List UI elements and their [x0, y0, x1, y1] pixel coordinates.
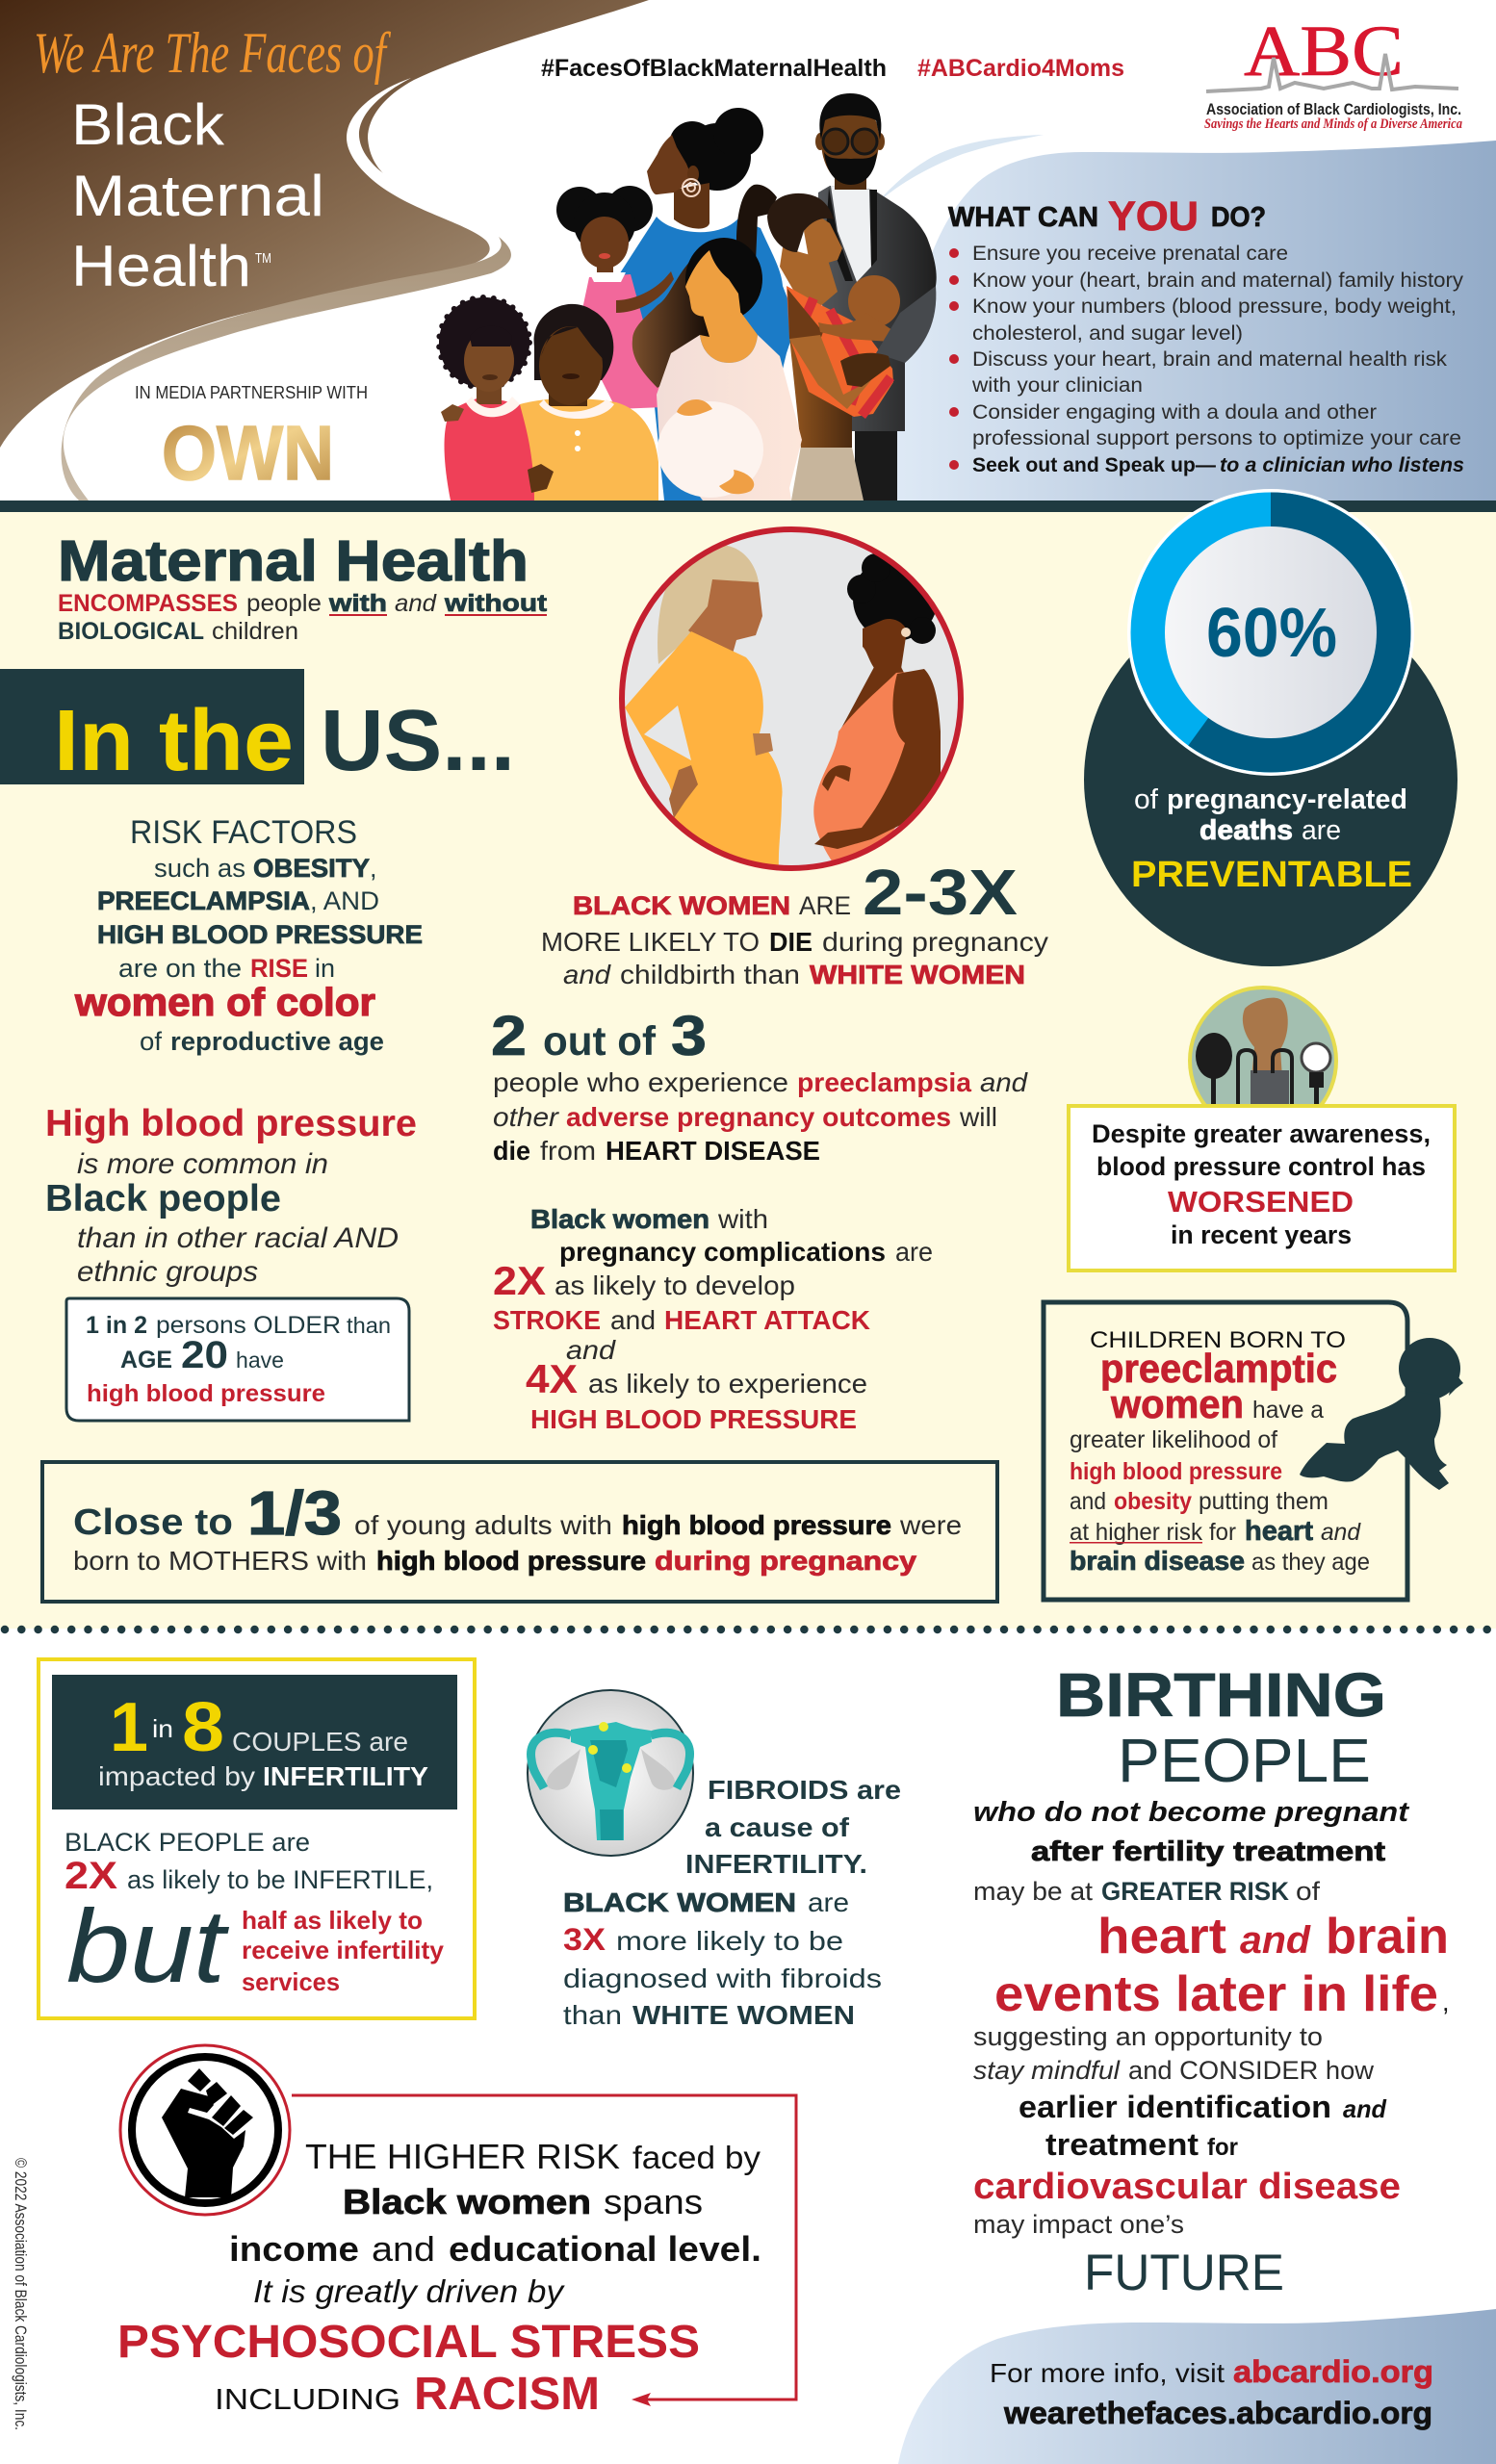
banner: 1 in 8 couples: 1: [110, 1689, 148, 1766]
text block: birthing people: who do not become pregnant: [973, 1797, 1409, 1828]
text block: risk factors: ,: [370, 854, 377, 883]
heading: Maternal Health: Maternal Health: [58, 529, 529, 593]
stat: 60% preventable: deaths: [1199, 815, 1293, 846]
text block: risk factors: in: [315, 954, 335, 983]
text block: birthing people: GREATER RISK: [1101, 1877, 1289, 1906]
callout: close to 1/3: born to MOTHERS with: [73, 1546, 367, 1576]
text block: risk factors: such as: [154, 854, 245, 883]
callout: close to 1/3: during pregnancy: [655, 1546, 916, 1576]
text block: risk factors: of: [140, 1027, 162, 1056]
panel: infertility: BLACK PEOPLE are: [64, 1828, 310, 1857]
text block: Black women pregnancy complications: as likely to experience: [588, 1369, 867, 1399]
text block: birthing people: events later in life: [994, 1966, 1438, 2022]
text block: birthing people: brain: [1326, 1909, 1449, 1964]
callout: children born to preeclamptic women: and: [1321, 1519, 1361, 1546]
callout: children born to preeclamptic women: and: [1070, 1488, 1106, 1515]
divider: dotted line: [0, 1629, 1496, 2464]
text block: 2-3X more likely to die: and: [563, 960, 611, 989]
heading: Maternal Health: ENCOMPASSES: [58, 590, 238, 617]
figure: woman in blue: [597, 108, 794, 500]
text block: risk factors: [74, 814, 423, 1056]
banner: 1 in 8 couples: in: [152, 1714, 173, 1743]
stat: 60% preventable: are: [1302, 815, 1341, 846]
panel: infertility: as likely to be INFERTILE,: [127, 1865, 433, 1894]
text block: Black women pregnancy complications: [493, 1204, 933, 1434]
text block: fibroids: BLACK WOMEN: [563, 1887, 796, 1917]
bullet list: Seek out and Speak up—: [972, 454, 1216, 476]
bullet list: Ensure you receive prenatal care: [972, 243, 1288, 265]
text block: birthing people: cardiovascular disease: [973, 2167, 1401, 2207]
callout: 1 in 2 persons: 1 in 2: [86, 1312, 147, 1339]
text block: high blood pressure in Black people: than in other racial AND: [77, 1222, 399, 1254]
media partnership: OWN: OWN: [162, 410, 334, 496]
banner: 1 in 8 couples: 8: [182, 1689, 224, 1766]
panel: what can you do: [948, 193, 1464, 476]
title: Black Maternal Health: Black: [71, 92, 225, 157]
text block: Black women pregnancy complications: STROKE: [493, 1305, 601, 1335]
arrowhead: [632, 2393, 651, 2406]
text block: Black women pregnancy complications: and: [566, 1335, 617, 1365]
callout: blood pressure control worsened: Despite greater awareness,: [1092, 1119, 1431, 1148]
callout: children born to preeclamptic women: high blood pressure: [1070, 1458, 1282, 1485]
figure: woman in red with afro: [439, 297, 549, 500]
text block: risk factors: HIGH BLOOD PRESSURE: [97, 920, 423, 949]
text block: birthing people: treatment: [1045, 2127, 1199, 2162]
text block: 2 out of 3: out of: [543, 1018, 657, 1065]
text block: birthing people: and: [1240, 1919, 1312, 1962]
title: Black Maternal Health: [71, 92, 324, 298]
text block: birthing people: heart: [1097, 1909, 1226, 1964]
text block: 2 out of 3: adverse pregnancy outcomes: [566, 1102, 951, 1132]
bullet list: Know your numbers (blood pressure, body weight,: [972, 295, 1457, 318]
background: cream section: [0, 510, 1496, 1629]
callout: 1 in 2 persons: [66, 1298, 409, 1421]
panel: infertility: but: [66, 1887, 229, 2004]
text block: 2 out of 3: [491, 1005, 1028, 1166]
text block: birthing people: earlier identification: [1019, 2090, 1331, 2124]
callout: 1 in 2 persons: than: [347, 1313, 391, 1338]
panel: infertility: 2X: [64, 1855, 117, 1897]
text block: psychosocial stress and racism: spans: [604, 2182, 703, 2221]
text block: high blood pressure in Black people: [45, 1103, 417, 1288]
callout: children born to preeclamptic women: greater likelihood of: [1070, 1426, 1277, 1453]
hashtags: [541, 55, 1124, 82]
banner: 1 in 8 couples: INFERTILITY: [263, 1761, 428, 1791]
heading: Maternal Health: BIOLOGICAL: [58, 618, 204, 645]
figure: woman with braids holding baby: [736, 185, 936, 500]
text block: birthing people: and: [1343, 2094, 1387, 2123]
callout: close to 1/3: 1/3: [247, 1478, 342, 1548]
illustration: two pregnant women in circle: [622, 529, 961, 871]
heading: Maternal Health: people: [246, 590, 322, 617]
arrow: red connector line to racism: [292, 2095, 796, 2400]
callout: children born to preeclamptic women: brain disease: [1070, 1546, 1245, 1576]
callout: 1 in 2 persons: have: [236, 1348, 284, 1373]
text block: birthing people: stay mindful: [973, 2056, 1121, 2085]
illustration: family group: [439, 93, 937, 500]
banner: 1 in 8 couples: impacted by: [98, 1761, 255, 1791]
text block: 2-3X more likely to die: MORE LIKELY TO: [541, 927, 760, 957]
callout: 1 in 2 persons: AGE: [120, 1347, 172, 1373]
callout: close to 1/3: high blood pressure: [622, 1510, 891, 1540]
text block: 2-3X more likely to die: childbirth than: [620, 960, 800, 989]
callout: children born to preeclamptic women: obesity: [1114, 1488, 1192, 1515]
figure: child in pink: [556, 186, 674, 409]
text block: birthing people: may impact one’s: [973, 2210, 1184, 2239]
bullet list: Discuss your heart, brain and maternal health risk: [972, 348, 1448, 371]
text block: birthing people: may be at: [973, 1877, 1094, 1906]
decorative blue swoosh and panel: [873, 135, 1496, 500]
text block: birthing people: PEOPLE: [1118, 1726, 1371, 1795]
hashtags: #FacesOfBlackMaternalHealth: [541, 55, 887, 82]
text block: 2 out of 3: people who experience: [493, 1067, 788, 1097]
panel: infertility: services: [242, 1967, 340, 1996]
text block: high blood pressure in Black people: Black people: [45, 1178, 281, 1219]
text block: psychosocial stress and racism: educational level.: [449, 2229, 761, 2269]
text block: psychosocial stress and racism: Black women: [343, 2182, 591, 2221]
text block: fibroids: than: [563, 2000, 622, 2030]
callout: 1 in 2 persons: persons OLDER: [156, 1312, 341, 1339]
footer: blue panel with links: wearethefaces.abcardio.org: [1003, 2396, 1432, 2430]
heading: what can you do: [948, 193, 1266, 240]
text block: high blood pressure in Black people: High blood pressure: [45, 1103, 417, 1144]
panel: infertility: receive infertility: [242, 1936, 445, 1964]
text block: 2-3X more likely to die: DIE: [769, 927, 812, 957]
text block: high blood pressure in Black people: is more common in: [77, 1148, 328, 1180]
logo: Association of Black Cardiologists: Savings the Hearts and Minds of a Diverse America: [1204, 116, 1462, 132]
figure: woman in yellow: [520, 304, 658, 500]
text block: 2-3X more likely to die: [541, 857, 1048, 989]
bullet list: Consider engaging with a doula and other: [972, 401, 1377, 424]
title: Black Maternal Health: TM: [255, 250, 271, 267]
heading: Maternal Health: and: [395, 590, 437, 617]
bullet list: to a clinician who listens: [1220, 454, 1464, 476]
panel: infertility: half as likely to: [242, 1906, 423, 1935]
text block: Black women pregnancy complications: Black women: [530, 1204, 709, 1234]
heading: Maternal Health: [58, 529, 548, 645]
icon: raised fist: [120, 2045, 290, 2215]
text block: fibroids: a cause of: [705, 1812, 850, 1842]
heading: Maternal Health: children: [212, 618, 298, 645]
text block: birthing people: BIRTHING: [1056, 1660, 1386, 1730]
text block: fibroids: more likely to be: [616, 1926, 843, 1956]
callout: blood pressure control worsened: in recent years: [1171, 1220, 1352, 1249]
text block: 2 out of 3: die: [493, 1136, 530, 1166]
text block: Black women pregnancy complications: with: [717, 1204, 768, 1234]
donut chart: 60 percent: [1148, 510, 1393, 755]
callout: children born to preeclamptic women: have a: [1252, 1397, 1324, 1424]
text block: fibroids: WHITE WOMEN: [632, 2000, 855, 2030]
text block: risk factors: women of color: [74, 980, 375, 1024]
text block: fibroids: diagnosed with fibroids: [563, 1964, 882, 1993]
divider band: [0, 500, 1496, 512]
media partnership: OWN: IN MEDIA PARTNERSHIP WITH: [135, 383, 368, 402]
heading: Maternal Health: without: [444, 590, 548, 617]
footer: blue panel with links: For more info, visit: [990, 2358, 1225, 2388]
text block: risk factors: , AND: [310, 886, 379, 915]
icon: blood pressure cuff and fist: [1188, 986, 1338, 1104]
callout: children born to preeclamptic women: heart: [1245, 1516, 1313, 1547]
figure: man with glasses: [815, 93, 937, 500]
bullet list: Know your (heart, brain and maternal) family history: [972, 270, 1464, 292]
heading: what can you do: YOU: [1108, 193, 1199, 240]
callout: children born to preeclamptic women: putting them: [1199, 1488, 1328, 1515]
stat: 60% preventable: PREVENTABLE: [1131, 855, 1412, 895]
text block: birthing people: and CONSIDER how: [1128, 2056, 1374, 2085]
text block: 2 out of 3: and: [980, 1067, 1028, 1097]
heading: In the US: In the: [54, 693, 294, 789]
text block: risk factors: RISE: [250, 954, 308, 983]
text block: Black women pregnancy complications: HEART ATTACK: [664, 1305, 870, 1335]
text block: 2 out of 3: 3: [671, 1005, 707, 1067]
banner: 1 in 8 couples: COUPLES are: [232, 1727, 408, 1757]
text block: 2-3X more likely to die: ARE: [799, 891, 851, 920]
heading: In the US: US...: [321, 693, 515, 789]
text block: risk factors: PREECLAMPSIA: [97, 886, 310, 915]
text block: psychosocial stress and racism: income: [229, 2229, 359, 2269]
callout: blood pressure control worsened: [1069, 1106, 1455, 1270]
text block: 2 out of 3: HEART DISEASE: [606, 1136, 820, 1166]
callout: close to 1/3: high blood pressure: [376, 1546, 646, 1576]
text block: psychosocial stress and racism: faced by: [632, 2140, 761, 2175]
figure: pregnant woman: [632, 238, 802, 500]
text block: Black women pregnancy complications: HIGH BLOOD PRESSURE: [530, 1404, 857, 1434]
text block: psychosocial stress and racism: THE HIGHER RISK: [305, 2137, 620, 2176]
callout: children born to preeclamptic women: at higher risk: [1070, 1519, 1202, 1546]
text block: Black women pregnancy complications: pregnancy complications: [559, 1237, 886, 1267]
text block: psychosocial stress and racism: [117, 2137, 761, 2420]
text block: Black women pregnancy complications: are: [895, 1237, 933, 1267]
callout: children born to preeclamptic women: preeclamptic: [1100, 1346, 1337, 1391]
text block: birthing people: for: [1207, 2134, 1238, 2161]
logo: Association of Black Cardiologists: ABC: [1244, 12, 1404, 91]
text block: high blood pressure in Black people: ethnic groups: [77, 1256, 258, 1288]
text block: psychosocial stress and racism: INCLUDING: [215, 2382, 400, 2416]
text block: birthing people: FUTURE: [1084, 2245, 1284, 2301]
text block: psychosocial stress and racism: It is greatly driven by: [253, 2273, 566, 2309]
bullet list: professional support persons to optimize your care: [972, 427, 1461, 449]
hashtags: #ABCardio4Moms: [917, 55, 1124, 82]
heading: In the US: [0, 669, 515, 789]
text block: risk factors: OBESITY: [253, 854, 370, 883]
text block: birthing people: after fertility treatment: [1031, 1836, 1385, 1867]
text block: birthing people: [973, 1660, 1450, 2301]
callout: close to 1/3: Close to: [73, 1502, 233, 1543]
text block: fibroids: [563, 1775, 901, 2030]
callout: blood pressure control worsened: WORSENED: [1168, 1185, 1354, 1219]
callout: 1 in 2 persons: 20: [181, 1334, 228, 1376]
header: brown swoosh banner: [0, 0, 649, 500]
callout: close to 1/3: [42, 1462, 997, 1602]
text block: fibroids: INFERTILITY.: [685, 1849, 867, 1879]
text block: 2 out of 3: preeclampsia: [797, 1067, 971, 1097]
text block: 2-3X more likely to die: BLACK WOMEN: [573, 891, 790, 920]
callout: children born to preeclamptic women: as they age: [1251, 1549, 1370, 1576]
text block: psychosocial stress and racism: RACISM: [414, 2369, 600, 2420]
text block: fibroids: 3X: [563, 1922, 606, 1957]
stat: 60% preventable: pregnancy-related: [1167, 784, 1407, 815]
text block: fibroids: are: [808, 1887, 849, 1917]
text block: birthing people: of: [1296, 1877, 1321, 1906]
text block: psychosocial stress and racism: PSYCHOSOCIAL STRESS: [117, 2317, 700, 2368]
media partnership: OWN: [135, 383, 368, 496]
callout: 1 in 2 persons: high blood pressure: [87, 1380, 325, 1407]
logo: Association of Black Cardiologists: [1204, 12, 1462, 132]
text block: 2-3X more likely to die: WHITE WOMEN: [810, 960, 1025, 989]
text block: Black women pregnancy complications: 4X: [526, 1356, 578, 1401]
text block: risk factors: are on the: [118, 954, 242, 983]
title: Black Maternal Health: Maternal: [71, 164, 324, 228]
text block: 2-3X more likely to die: 2-3X: [863, 857, 1018, 929]
footer: blue panel with links: [898, 2309, 1496, 2464]
bullet list: with your clinician: [971, 374, 1143, 397]
text block: 2 out of 3: other: [493, 1102, 560, 1132]
stat: 60% preventable: [1084, 489, 1457, 966]
text block: fibroids: FIBROIDS are: [708, 1775, 901, 1805]
icon: crawling baby silhouette: [1300, 1338, 1463, 1490]
donut chart: 60 percent: 60%: [1206, 595, 1337, 672]
callout: children born to preeclamptic women: CHILDREN BORN TO: [1090, 1327, 1346, 1353]
banner: 1 in 8 couples: [52, 1675, 457, 1810]
callout: children born to preeclamptic women: for: [1209, 1519, 1236, 1546]
callout: close to 1/3: were: [899, 1510, 962, 1540]
text block: 2 out of 3: 2: [491, 1005, 527, 1067]
callout: close to 1/3: of young adults with: [354, 1510, 612, 1540]
text block: 2 out of 3: will: [959, 1102, 997, 1132]
bullet list: [949, 243, 1464, 476]
callout: children born to preeclamptic women: [1044, 1302, 1407, 1600]
text block: birthing people: ,: [1442, 1988, 1450, 2016]
text block: 2-3X more likely to die: during pregnancy: [822, 927, 1048, 957]
text block: 2 out of 3: from: [540, 1136, 596, 1166]
panel: infertility: [39, 1659, 475, 2018]
stat: 60% preventable: of: [1134, 784, 1159, 815]
text block: risk factors: RISK FACTORS: [130, 814, 357, 851]
text block: Black women pregnancy complications: and: [610, 1305, 656, 1335]
callout: children born to preeclamptic women: women: [1110, 1381, 1244, 1426]
title: Black Maternal Health: Health: [71, 234, 251, 298]
text block: birthing people: suggesting an opportunity to: [973, 2022, 1323, 2051]
heading: We Are The Faces of: We Are The Faces of: [34, 21, 391, 85]
heading: what can you do: DO?: [1211, 202, 1266, 233]
heading: Maternal Health: with: [328, 590, 387, 617]
text block: Black women pregnancy complications: 2X: [493, 1258, 546, 1303]
bullet list: cholesterol, and sugar level): [972, 322, 1243, 345]
heading: what can you do: WHAT CAN: [948, 202, 1098, 233]
icon: uterus with fibroids: [528, 1690, 693, 1856]
text block: psychosocial stress and racism: and: [372, 2229, 435, 2269]
text block: Black women pregnancy complications: as likely to develop: [555, 1270, 795, 1300]
text block: risk factors: reproductive age: [170, 1027, 384, 1056]
callout: blood pressure control worsened: blood pressure control has: [1096, 1152, 1426, 1181]
footer: blue panel with links: abcardio.org: [1233, 2354, 1433, 2389]
